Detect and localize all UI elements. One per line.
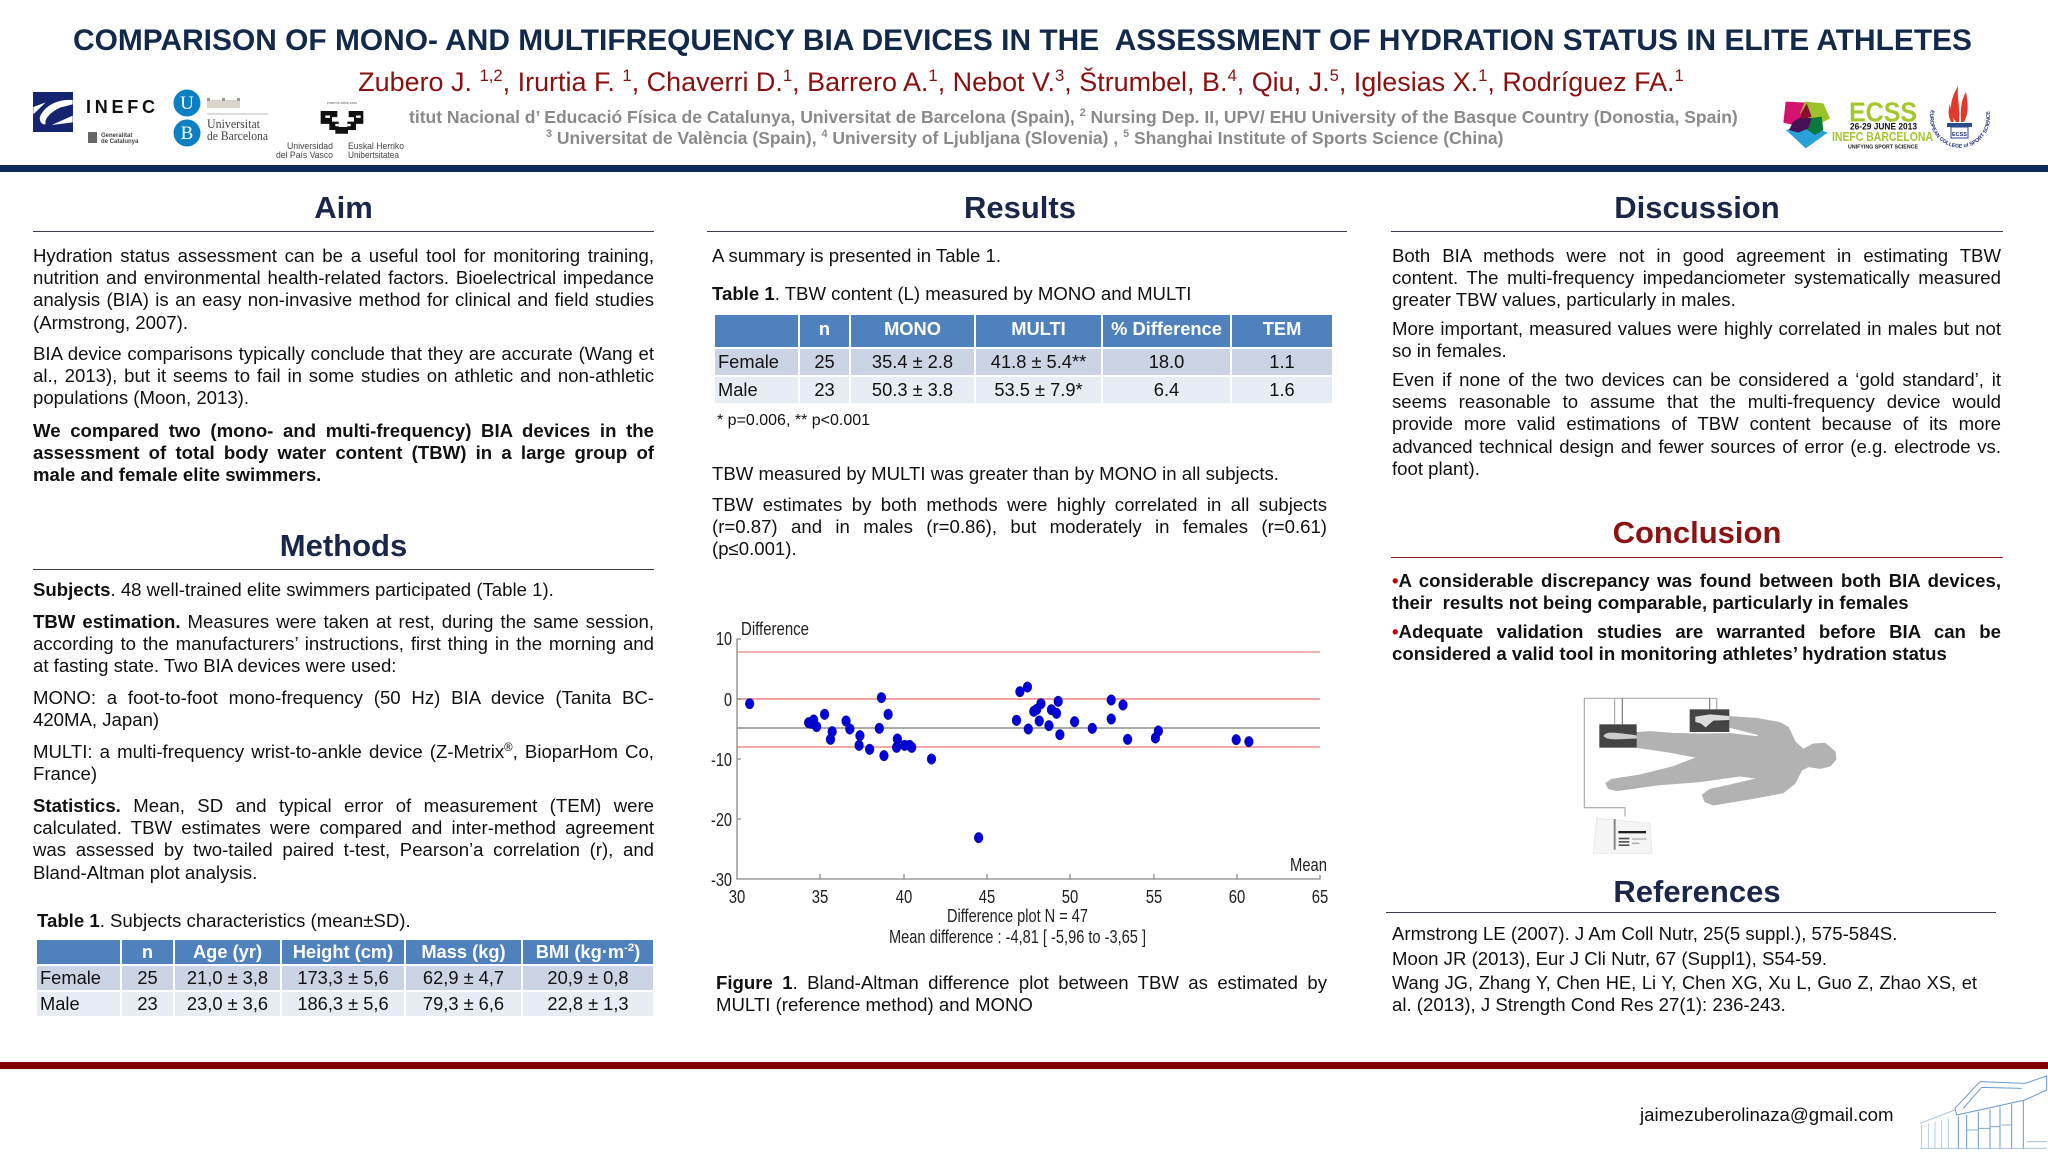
- text: correlation: (p≤0.001).: [712, 538, 797, 559]
- text: aim paragraph 2: populations (Moon, 2013).: [33, 387, 249, 408]
- heading: results: Results: [964, 190, 1076, 225]
- text: statistics: [33, 795, 654, 883]
- authors: Zubero J. 1,2, Irurtia F. 1, Chaverri D.1, Barrero A.1, Nebot V.3, Štrumbel, B.4, Qiu, J.5, Iglesias X.1, Rodríguez FA.1: [358, 66, 1684, 97]
- table: subjects characteristics: Height (cm): [293, 941, 393, 962]
- table: subjects characteristics: n: [142, 941, 153, 962]
- text: conclusion bullet 1: •A considerable discrepancy was found between both BIA devices,: [1392, 570, 2001, 591]
- text: conclusion bullet 1: [1392, 570, 2001, 613]
- text: TBW estimation: TBW estimation. Measures were taken at rest, during the same session,: [33, 611, 654, 632]
- logo: Universitat de Barcelona: de Barcelona: [207, 129, 268, 143]
- y axis labels: -30: [711, 869, 732, 890]
- text: MULTI device: [33, 741, 654, 784]
- plot note: N: Difference plot N = 47: [947, 906, 1088, 926]
- logo: INEFC: de Catalunya: [101, 139, 139, 145]
- table: subjects characteristics: 23: [137, 993, 158, 1014]
- panel: methods: [33, 528, 654, 883]
- table: TBW content: 23: [814, 379, 835, 400]
- icon: wrist electrode box: [1690, 709, 1729, 732]
- table: subjects characteristics: 23,0 ± 3,6: [187, 993, 268, 1014]
- text: aim statement: We compared two (mono- and multi-frequency) BIA devices in the: [33, 420, 654, 441]
- text: MONO device: 420MA, Japan): [33, 709, 159, 730]
- table: TBW content: MONO: [884, 318, 941, 339]
- text: aim paragraph 1: [33, 245, 654, 333]
- figure caption: [716, 972, 1327, 1015]
- text: discussion paragraph 2: so in females.: [1392, 340, 1507, 361]
- panel: discussion: [1391, 190, 2003, 479]
- x axis labels: [729, 886, 1328, 907]
- text: statistics: was assessed by two-tailed paired t-test, Pearson’a correlation (r), and: [33, 839, 654, 860]
- text: reference 3: al. (2013), J Strength Cond Res 27(1): 236-243.: [1392, 994, 1786, 1015]
- logo: Universidad del País Vasco: Universidad: [287, 141, 333, 152]
- panel: results: [707, 190, 1347, 559]
- wires: [1584, 698, 1717, 817]
- table: subjects characteristics: 20,9 ± 0,8: [547, 967, 629, 988]
- text: MONO device: MONO: a foot-to-foot mono-frequency (50 Hz) BIA device (Tanita BC-: [33, 687, 654, 708]
- text: statistics: Bland-Altman plot analysis.: [33, 862, 257, 883]
- illustration: wrist-to-ankle BIA measurement: [1584, 698, 1836, 854]
- logo: Universitat de Barcelona: B: [181, 123, 193, 144]
- text: aim statement: assessment of total body water content (TBW) in a large group of: [33, 442, 654, 463]
- heading: aim: [33, 190, 654, 232]
- text: aim paragraph 2: al., 2013), but it seems to fail in some studies on athletic and non-athletic: [33, 365, 654, 386]
- logo: Universidad del País Vasco: del País Vasco: [276, 150, 333, 161]
- logo: European College of Sport Science: EUROPEAN COLLEGE of SPORT SCIENCE: [1930, 110, 1990, 148]
- x axis labels: 65: [1312, 886, 1328, 907]
- logo: Universitat de Barcelona: [174, 90, 268, 146]
- affiliations line 1: titut Nacional d’ Educació Física de Catalunya, Universitat de Barcelona (Spain), 2 Nursing Dep. II, UPV/ EHU University of the Basque Country (Donostia, Spain): [409, 107, 1738, 127]
- text: aim statement: [33, 420, 654, 485]
- heading: conclusion: Conclusion: [1613, 515, 1781, 550]
- text: MULTI device: MULTI: a multi-frequency wrist-to-ankle device (Z-Metrix®, BioparHom Co,: [33, 741, 654, 762]
- axis title: mean: Mean: [1290, 855, 1327, 875]
- header band: [0, 24, 2048, 172]
- text: aim paragraph 2: BIA device comparisons typically conclude that they are accurate (Wang et: [33, 343, 654, 364]
- logo: ECSS congress: [1783, 96, 1933, 150]
- plot note: mean difference: Mean difference : -4,81 [ -5,96 to -3,65 ]: [889, 927, 1146, 947]
- logo: ECSS congress: 26-29 JUNE 2013: [1850, 122, 1917, 132]
- text: subjects: Subjects. 48 well-trained elite swimmers participated (Table 1).: [33, 579, 554, 600]
- text: TBW estimation: [33, 611, 654, 676]
- text: statistics: Statistics. Mean, SD and typical error of measurement (TEM) were: [33, 795, 654, 816]
- text: TBW estimation: according to the manufacturers’ instructions, first thing in the morning and: [33, 633, 654, 654]
- table: TBW content: Male: [718, 379, 758, 400]
- table: TBW content: 25: [814, 351, 835, 372]
- table: subjects characteristics: 25: [137, 967, 158, 988]
- x axis labels: 35: [812, 886, 828, 907]
- text: TBW greater: TBW measured by MULTI was greater than by MONO in all subjects.: [712, 463, 1279, 484]
- text: reference 2: Moon JR (2013), Eur J Cli Nutr, 67 (Suppl1), S54-59.: [1392, 948, 1827, 969]
- heading: conclusion: [1391, 515, 2003, 558]
- text: statistics: calculated. TBW estimates were compared and inter-method agreement: [33, 817, 654, 838]
- icon: body silhouette: [1606, 717, 1836, 805]
- table: TBW content: 18.0: [1149, 351, 1184, 372]
- table: subjects characteristics: Mass (kg): [421, 941, 506, 962]
- table: subjects characteristics: Male: [40, 993, 80, 1014]
- text: results summary: A summary is presented in Table 1.: [712, 245, 1001, 266]
- axis title: difference: Difference: [741, 619, 809, 639]
- text: discussion paragraph 3: seems reasonable to assume that the multi-frequency device would: [1392, 391, 2001, 412]
- table: TBW content: 35.4 ± 2.8: [872, 351, 953, 372]
- text: correlation: TBW estimates by both methods were highly correlated in all subjects: [712, 494, 1327, 515]
- x axis labels: 45: [979, 886, 995, 907]
- text: TBW estimation: at fasting state. Two BIA devices were used:: [33, 655, 396, 676]
- logo: Universidad del País Vasco: eman ta zabal zazu: [327, 101, 357, 105]
- table caption: Table 1. TBW content (L) measured by MONO and MULTI: [712, 283, 1191, 304]
- panel: references: [1386, 874, 1996, 1015]
- icon: INEFC building: [1915, 1072, 2048, 1155]
- logo: Universidad del País Vasco: Euskal Herriko: [348, 141, 404, 152]
- text: aim paragraph 2: [33, 343, 654, 408]
- table: TBW content: 1.6: [1269, 379, 1295, 400]
- text: aim statement: male and female elite swimmers.: [33, 464, 321, 485]
- text: aim paragraph 1: analysis (BIA) is an easy non-invasive method for clinical and field studies: [33, 289, 654, 310]
- text: reference 1: Armstrong LE (2007). J Am Coll Nutr, 25(5 suppl.), 575-584S.: [1392, 923, 1897, 944]
- table: TBW content: MULTI: [1011, 318, 1066, 339]
- text: correlation: [712, 494, 1327, 559]
- x axis labels: 60: [1229, 886, 1245, 907]
- icon: measuring device: [1593, 818, 1652, 853]
- heading: references: [1386, 874, 1996, 913]
- table: TBW content: TEM: [1263, 318, 1301, 339]
- heading: discussion: [1391, 190, 2003, 232]
- text: conclusion bullet 1: their results not being comparable, particularly in females: [1392, 592, 1909, 613]
- logo: Universitat de Barcelona: U: [180, 93, 194, 114]
- x axis labels: 55: [1146, 886, 1162, 907]
- table footnote: * p=0.006, ** p<0.001: [717, 412, 870, 429]
- heading: discussion: Discussion: [1614, 190, 1780, 225]
- heading: aim: Aim: [314, 190, 373, 225]
- table: subjects characteristics: Age (yr): [193, 941, 262, 962]
- text: conclusion bullet 2: •Adequate validation studies are warranted before BIA can be: [1392, 621, 2001, 642]
- table: subjects characteristics: 186,3 ± 5,6: [297, 993, 389, 1014]
- data points: [745, 682, 1253, 843]
- text: discussion paragraph 1: greater TBW values, particularly in males.: [1392, 289, 1736, 310]
- table: TBW content: 6.4: [1154, 379, 1179, 400]
- table: subjects characteristics: BMI (kg·m-2): [536, 941, 640, 962]
- panel: subjects table: [37, 910, 653, 1016]
- table: subjects characteristics: 79,3 ± 6,6: [423, 993, 504, 1014]
- logo: ECSS congress: UNIFYING SPORT SCIENCE: [1848, 144, 1918, 150]
- panel: aim: [33, 190, 654, 485]
- table: TBW content: Female: [718, 351, 779, 372]
- y axis labels: [711, 628, 732, 890]
- table: subjects characteristics: Female: [40, 967, 101, 988]
- y axis labels: -10: [711, 749, 732, 770]
- table: TBW content: 1.1: [1269, 351, 1295, 372]
- x axis labels: 40: [896, 886, 912, 907]
- logo: ECSS congress: ECSS: [1849, 96, 1917, 128]
- icon: ankle electrode box: [1599, 724, 1637, 748]
- text: discussion paragraph 3: [1392, 369, 2001, 479]
- logo: INEFC: Generalitat: [101, 133, 132, 139]
- text: discussion paragraph 1: content. The multi-frequency impedanciometer systematically measured: [1392, 267, 2001, 288]
- text: discussion paragraph 3: foot plant).: [1392, 458, 1480, 479]
- table caption: Table 1. Subjects characteristics (mean±SD).: [37, 910, 411, 931]
- panel: conclusion: [1391, 515, 2003, 664]
- affiliations line 2: 3 Universitat de València (Spain), 4 University of Ljubljana (Slovenia) , 5 Shanghai Institute of Sports Science (China): [546, 128, 1503, 148]
- logo: European College of Sport Science: [1930, 86, 1990, 148]
- table: subjects characteristics: [37, 940, 653, 1016]
- y axis labels: 10: [716, 628, 732, 649]
- table: TBW content: % Difference: [1111, 318, 1222, 339]
- text: correlation: (r=0.87) and in males (r=0.86), but moderately in females (r=0.61): [712, 516, 1327, 537]
- logo: Universitat de Barcelona: Universitat: [207, 117, 260, 131]
- text: aim paragraph 1: (Armstrong, 2007).: [33, 312, 188, 333]
- limit and mean lines: [737, 652, 1320, 747]
- table: subjects characteristics: 21,0 ± 3,8: [187, 967, 268, 988]
- x axis labels: 50: [1062, 886, 1078, 907]
- heading: methods: [33, 528, 654, 570]
- logo: Universidad del País Vasco: [276, 101, 404, 161]
- text: aim paragraph 1: nutrition and environmental health-related factors. Bioelectrical impedance: [33, 267, 654, 288]
- text: conclusion bullet 2: considered a valid tool in monitoring athletes’ hydration status: [1392, 643, 1947, 664]
- text: MONO device: [33, 687, 654, 730]
- table: TBW content: [715, 315, 1332, 403]
- y axis labels: 0: [724, 689, 732, 710]
- text: discussion paragraph 3: Even if none of the two devices can be considered a ‘gold standard’, it: [1392, 369, 2001, 390]
- text: discussion paragraph 3: advanced technical design and fewer sources of error (e.g. electrode vs.: [1392, 436, 2001, 457]
- text: discussion paragraph 2: [1392, 318, 2001, 361]
- text: discussion paragraph 1: Both BIA methods were not in good agreement in estimating TBW: [1392, 245, 2001, 266]
- contact email: jaimezuberolinaza@gmail.com: [1640, 1104, 1893, 1125]
- table: subjects characteristics: 62,9 ± 4,7: [423, 967, 504, 988]
- table: subjects characteristics: 173,3 ± 5,6: [297, 967, 389, 988]
- text: discussion paragraph 2: More important, measured values were highly correlated in males but not: [1392, 318, 2001, 339]
- table: TBW content: n: [819, 318, 830, 339]
- figure caption: MULTI (reference method) and MONO: [716, 994, 1033, 1015]
- text: aim paragraph 1: Hydration status assessment can be a useful tool for monitoring training,: [33, 245, 654, 266]
- heading: results: [707, 190, 1347, 232]
- chart: Bland-Altman difference plot: [711, 619, 1328, 947]
- text: reference 3: [1392, 972, 1977, 1016]
- table: TBW content: 50.3 ± 3.8: [872, 379, 953, 400]
- table: subjects characteristics: 22,8 ± 1,3: [547, 993, 629, 1014]
- heading: methods: Methods: [280, 528, 407, 563]
- text: discussion paragraph 1: [1392, 245, 2001, 310]
- logo: INEFC: [33, 92, 155, 145]
- logo: Universidad del País Vasco: Unibertsitatea: [348, 150, 400, 161]
- logo: European College of Sport Science: ECSS: [1952, 132, 1967, 138]
- logo: INEFC: INEFC: [86, 97, 155, 117]
- footer red bar: [0, 1062, 2048, 1069]
- text: discussion paragraph 3: provide more valid estimations of TBW content because of its more: [1392, 413, 2001, 434]
- text: reference 3: Wang JG, Zhang Y, Chen HE, Li Y, Chen XG, Xu L, Guo Z, Zhao XS, et: [1392, 972, 1977, 993]
- navy divider bar: [0, 165, 2048, 172]
- table: TBW content: 53.5 ± 7.9*: [994, 379, 1083, 400]
- axes: [737, 639, 1320, 879]
- x axis labels: 30: [729, 886, 745, 907]
- y axis labels: -20: [711, 809, 732, 830]
- table: TBW content: 41.8 ± 5.4**: [991, 351, 1086, 372]
- title: COMPARISON OF MONO- AND MULTIFREQUENCY BIA DEVICES IN THE ASSESSMENT OF HYDRATION STATUS IN ELITE ATHLETES: [73, 24, 1972, 57]
- text: MULTI device: France): [33, 763, 97, 784]
- heading: references: References: [1613, 874, 1781, 909]
- figure caption: Figure 1. Bland-Altman difference plot between TBW as estimated by: [716, 972, 1327, 993]
- text: conclusion bullet 2: [1392, 621, 2001, 664]
